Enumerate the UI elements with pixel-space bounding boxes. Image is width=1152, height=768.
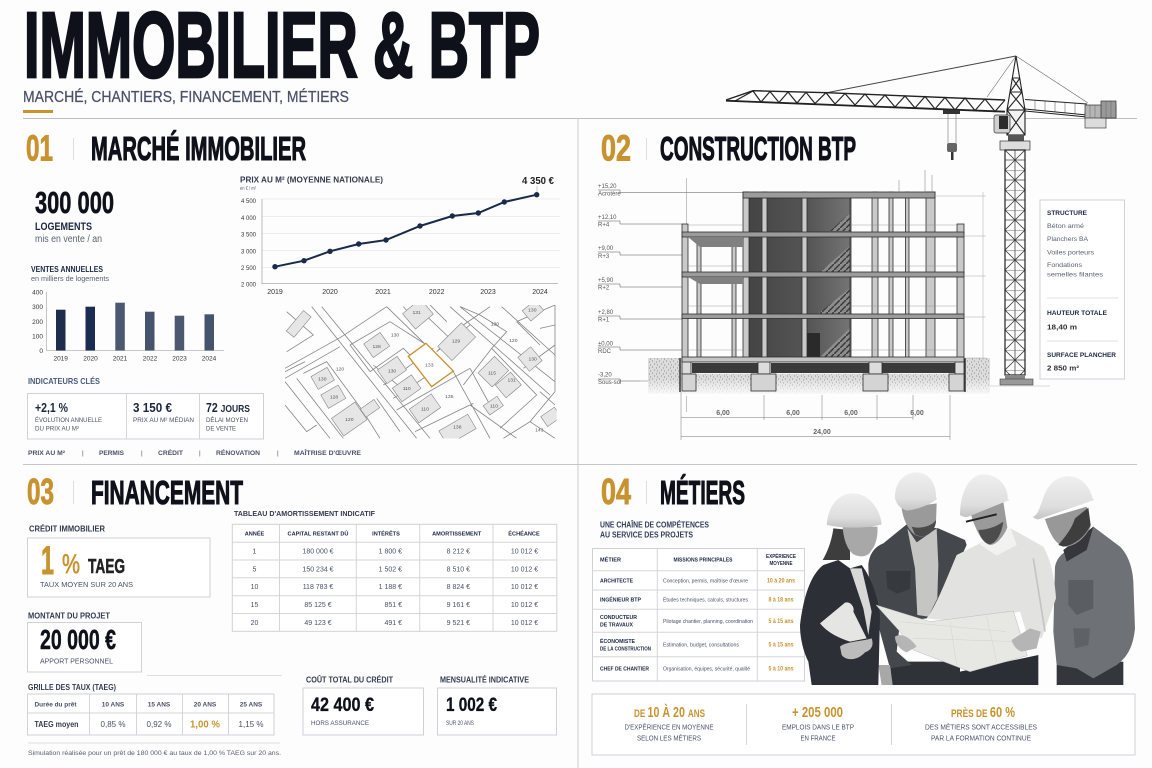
table: grille des taux: TAEG moyen bbox=[34, 720, 79, 729]
cadastral map: 130 bbox=[491, 322, 499, 328]
cadastral map: 110 bbox=[490, 403, 498, 409]
line chart: prix au m²: 4 000 bbox=[241, 215, 256, 222]
card: crédit immobilier: TAEG bbox=[88, 556, 125, 578]
bar chart: ventes annuelles: en milliers de logements bbox=[31, 274, 109, 283]
panel: structure specifications: SURFACE PLANCHER bbox=[1047, 352, 1116, 359]
stat: emplois bbox=[782, 705, 854, 742]
card: montant du projet: APPORT PERSONNEL bbox=[40, 656, 113, 666]
dimension lines: 6,00 bbox=[786, 410, 800, 417]
table: grille des taux: 10 ANS bbox=[102, 702, 125, 708]
cadastral map: 138 bbox=[453, 425, 462, 431]
table: grille des taux: 0,85 % bbox=[101, 720, 125, 729]
card: montant du projet: 20 000 € bbox=[40, 624, 116, 655]
line chart: prix au m²: 2024 bbox=[532, 289, 548, 296]
bar chart: ventes annuelles: 100 bbox=[32, 334, 43, 340]
tag row: PERMIS bbox=[99, 450, 125, 457]
line chart: prix au m²: 4 500 bbox=[241, 198, 256, 205]
panel: 03 financement bbox=[27, 471, 557, 757]
stat: expérience: DE 10 À 20 ANS bbox=[634, 704, 705, 721]
table: amortissement: 150 234 € bbox=[302, 566, 334, 574]
key figure: 300 000 logements: LOGEMENTS bbox=[35, 221, 92, 233]
table: métiers: MÉTIER bbox=[600, 556, 621, 564]
building section drawing bbox=[640, 170, 998, 440]
table: métiers: 5 à 15 ans bbox=[768, 642, 794, 648]
table: amortissement: ÉCHÉANCE bbox=[508, 530, 540, 538]
table: amortissement: CAPITAL RESTANT DÛ bbox=[288, 530, 348, 538]
panel: structure specifications: Fondations bbox=[1047, 262, 1083, 269]
cadastral map: 110 bbox=[421, 407, 429, 413]
cadastral map: 130 bbox=[388, 368, 396, 374]
table: métiers: Estimation, budget, consultations bbox=[663, 642, 739, 648]
line chart: prix au m²: 2022 bbox=[429, 289, 445, 296]
panel: structure specifications: HAUTEUR TOTALE bbox=[1047, 310, 1107, 317]
card: mensualité indicative: 1 002 € bbox=[446, 695, 497, 716]
table: métiers bbox=[592, 548, 804, 681]
table: amortissement: 10 012 € bbox=[511, 620, 538, 627]
card: crédit immobilier: CRÉDIT IMMOBILIER bbox=[29, 524, 105, 534]
section heading 03: FINANCEMENT bbox=[91, 474, 243, 511]
level labels: +2,80 bbox=[598, 310, 614, 316]
dimension lines: 6,00 bbox=[910, 410, 924, 417]
section heading 02: 02 bbox=[601, 128, 631, 168]
tag row: | bbox=[277, 450, 279, 457]
panel: structure specifications: Planchers BA bbox=[1047, 236, 1088, 243]
panel: structure specifications: 2 850 m² bbox=[1047, 366, 1080, 372]
tower crane bbox=[726, 56, 1116, 386]
level labels: R+3 bbox=[598, 254, 610, 260]
table: métiers: ARCHITECTE bbox=[600, 578, 633, 584]
line chart: prix au m²: PRIX AU M² (MOYENNE NATIONALE) bbox=[240, 174, 383, 184]
stat: formation: DES MÉTIERS SONT ACCESSIBLES bbox=[925, 722, 1037, 732]
panel: structure specifications bbox=[1040, 200, 1124, 379]
section heading 01 bbox=[26, 128, 306, 168]
table: métiers: ÉCONOMISTE bbox=[600, 637, 635, 645]
level labels: +9,00 bbox=[598, 246, 614, 252]
level labels: R+2 bbox=[598, 286, 610, 292]
table: amortissement: 1 bbox=[253, 548, 257, 556]
card: coût total du crédit: HORS ASSURANCE bbox=[311, 720, 370, 727]
crane base bbox=[990, 375, 1050, 386]
bar chart: ventes annuelles bbox=[31, 264, 224, 362]
table: amortissement: 10 bbox=[251, 584, 258, 591]
table: amortissement: 491 € bbox=[384, 620, 402, 627]
subheading: UNE CHAÎNE DE COMPÉTENCES bbox=[600, 520, 710, 530]
level labels: Acrotère bbox=[598, 192, 621, 198]
panel: 01 marché immobilier bbox=[26, 128, 561, 457]
cadastral map: 131 bbox=[507, 378, 516, 384]
table: métiers: Conception, permis, maîtrise d'œuvre bbox=[663, 578, 748, 584]
table: métiers: CONDUCTEUR bbox=[600, 615, 637, 621]
table: amortissement: 5 bbox=[253, 566, 257, 574]
key indicators: INDICATEURS CLÉS bbox=[28, 376, 100, 386]
panel: structure specifications: Béton armé bbox=[1047, 223, 1084, 230]
bar chart: ventes annuelles: 2024 bbox=[202, 356, 217, 362]
line chart: prix au m² bbox=[240, 174, 560, 296]
section heading 04 bbox=[601, 471, 745, 512]
cadastral map: 130 bbox=[528, 308, 537, 314]
card: crédit immobilier bbox=[28, 524, 210, 597]
worker 3 bbox=[927, 474, 1056, 685]
key indicators: DU PRIX AU M² bbox=[35, 426, 79, 432]
blueprint held by workers bbox=[876, 605, 1041, 672]
panel: structure specifications: semelles filantes bbox=[1047, 272, 1104, 278]
table: amortissement: 851 € bbox=[384, 602, 402, 609]
key indicators: DE VENTE bbox=[206, 426, 236, 432]
line chart: prix au m²: 2019 bbox=[267, 289, 283, 296]
card: crédit immobilier: TAUX MOYEN SUR 20 ANS bbox=[40, 580, 133, 589]
line chart: prix au m²: 2 000 bbox=[241, 282, 256, 288]
table: métiers: MISSIONS PRINCIPALES bbox=[674, 558, 733, 564]
key indicators: DÉLAI MOYEN bbox=[206, 417, 248, 424]
key figures banner bbox=[592, 694, 1135, 755]
frame bbox=[682, 170, 964, 362]
accent bar bbox=[23, 110, 53, 113]
table: amortissement: TABLEAU D'AMORTISSEMENT INDICATIF bbox=[234, 509, 375, 518]
table: grille des taux bbox=[28, 683, 274, 735]
table: amortissement: 10 012 € bbox=[511, 602, 538, 609]
line chart: prix au m²: en € / m² bbox=[240, 186, 256, 192]
table: amortissement: 10 012 € bbox=[511, 584, 538, 591]
dimension lines bbox=[681, 192, 986, 440]
stat: emplois: + 205 000 bbox=[792, 705, 843, 721]
section heading 04: MÉTIERS bbox=[660, 474, 745, 511]
cadastral map: 115 bbox=[488, 370, 496, 376]
tag row: | bbox=[82, 450, 84, 457]
key indicators: PRIX AU M² MÉDIAN bbox=[133, 417, 194, 424]
panel: structure specifications: STRUCTURE bbox=[1047, 210, 1087, 217]
stat: expérience bbox=[624, 704, 714, 742]
stairs bbox=[807, 213, 850, 357]
counterweight bbox=[1085, 101, 1116, 128]
line chart: prix au m²: 4 350 € bbox=[522, 175, 554, 187]
table: grille des taux: 15 ANS bbox=[148, 702, 171, 708]
table: métiers: Organisation, équipes, sécurité, qualité bbox=[663, 666, 750, 672]
table: métiers: 5 à 10 ans bbox=[768, 666, 794, 672]
cadastral map: 130 bbox=[318, 377, 327, 383]
section heading 02: CONSTRUCTION BTP bbox=[660, 130, 856, 167]
subheading bbox=[600, 520, 710, 540]
turntable bbox=[1000, 135, 1030, 150]
subheading: AU SERVICE DES PROJETS bbox=[600, 530, 694, 540]
table: grille des taux: Durée du prêt bbox=[34, 702, 77, 708]
cadastral map: 130 bbox=[528, 357, 537, 363]
stat: formation bbox=[925, 705, 1037, 742]
cadastral map: 131 bbox=[413, 310, 421, 316]
key indicators: +2,1 % bbox=[35, 400, 68, 415]
table: métiers: MOYENNE bbox=[770, 561, 793, 567]
stat: emplois: EMPLOIS DANS LE BTP bbox=[782, 724, 854, 732]
level labels: ±0,00 bbox=[598, 342, 614, 348]
line chart: prix au m²: 3 000 bbox=[241, 248, 256, 256]
stat: formation: PAR LA FORMATION CONTINUE bbox=[931, 736, 1031, 742]
crane jib bbox=[726, 56, 1088, 117]
panel: structure specifications: 18,40 m bbox=[1047, 324, 1077, 332]
worker 2 bbox=[868, 472, 967, 685]
cadastral map bbox=[285, 305, 557, 438]
line chart: prix au m²: 2020 bbox=[322, 289, 338, 296]
line chart: prix au m²: 3 500 bbox=[241, 232, 256, 238]
card: montant du projet bbox=[28, 610, 142, 672]
bar chart: ventes annuelles: 0 bbox=[39, 348, 43, 355]
key figure: 300 000 logements: 300 000 bbox=[35, 185, 114, 220]
line chart: prix au m²: 2021 bbox=[375, 289, 391, 296]
card: mensualité indicative: MENSUALITÉ INDICATIVE bbox=[440, 676, 530, 684]
bar chart: ventes annuelles: 400 bbox=[32, 290, 43, 296]
tag row: | bbox=[141, 450, 143, 457]
section heading 02 bbox=[601, 128, 856, 168]
table: grille des taux: 1,00 % bbox=[190, 720, 220, 730]
panel: 02 construction BTP bbox=[598, 56, 1124, 440]
table: amortissement: 49 123 € bbox=[304, 620, 332, 627]
level labels: -3,20 bbox=[598, 372, 612, 378]
panel: structure specifications: Voiles porteurs bbox=[1047, 250, 1095, 256]
section heading 03: 03 bbox=[27, 471, 54, 512]
soil and foundations bbox=[640, 358, 998, 396]
level labels: RDC bbox=[598, 349, 612, 355]
cadastral map: 129 bbox=[452, 338, 460, 344]
table: amortissement: AMORTISSEMENT bbox=[432, 532, 482, 538]
mast bbox=[1005, 150, 1025, 375]
cadastral map: 120 bbox=[336, 367, 344, 373]
level labels bbox=[598, 178, 743, 412]
tag row: PRIX AU M² bbox=[28, 450, 66, 457]
section heading 01: 01 bbox=[26, 128, 53, 168]
card: mensualité indicative: SUR 20 ANS bbox=[446, 720, 474, 727]
table: amortissement: 10 012 € bbox=[511, 548, 538, 556]
bar chart: ventes annuelles: 200 bbox=[32, 319, 43, 326]
cadastral map: 120 bbox=[509, 338, 518, 344]
table: grille des taux: 1,15 % bbox=[239, 720, 263, 729]
bar chart: ventes annuelles: VENTES ANNUELLES bbox=[31, 264, 103, 274]
table: métiers: 5 à 15 ans bbox=[768, 619, 794, 625]
key indicators bbox=[28, 376, 264, 439]
dimension lines: 24,00 bbox=[813, 429, 831, 436]
table: amortissement: 9 521 € bbox=[447, 620, 470, 627]
table: métiers: CHEF DE CHANTIER bbox=[600, 666, 649, 672]
table: amortissement: 15 bbox=[251, 602, 258, 609]
table: amortissement: 118 783 € bbox=[303, 584, 333, 591]
table: métiers: Études techniques, calculs, structures bbox=[663, 596, 748, 604]
tag row: MAÎTRISE D'ŒUVRE bbox=[294, 448, 362, 457]
level labels: +12,10 bbox=[598, 215, 617, 221]
table: métiers: EXPÉRIENCE bbox=[766, 552, 797, 560]
table: amortissement: 8 824 € bbox=[447, 584, 470, 591]
level labels: R+1 bbox=[598, 318, 610, 324]
stat: expérience: SELON LES MÉTIERS bbox=[637, 734, 701, 742]
tag row: CRÉDIT bbox=[158, 448, 183, 457]
cab bbox=[994, 115, 1010, 133]
footnote: Simulation réalisée pour un prêt de 180 000 € au taux de 1,00 % TAEG sur 20 ans. bbox=[28, 750, 281, 757]
level labels: Sous-sol bbox=[598, 380, 621, 386]
card: crédit immobilier: % bbox=[62, 549, 80, 579]
bar chart: ventes annuelles: 300 bbox=[32, 304, 43, 311]
table: grille des taux: 25 ANS bbox=[240, 702, 263, 708]
cadastral map: 128 bbox=[373, 344, 381, 350]
cadastral map: 120 bbox=[345, 417, 354, 423]
table: amortissement: ANNÉE bbox=[245, 530, 265, 538]
table: amortissement: 85 125 € bbox=[304, 602, 332, 609]
stat: expérience: D'EXPÉRIENCE EN MOYENNE bbox=[624, 722, 714, 732]
illustration: four workers with helmets reading a plan bbox=[800, 472, 1135, 685]
bar chart: ventes annuelles: 2019 bbox=[53, 356, 68, 362]
table: métiers: DE LA CONSTRUCTION bbox=[600, 646, 651, 652]
table: métiers: Pilotage chantier, planning, coordination bbox=[663, 619, 753, 625]
bar chart: ventes annuelles: 2021 bbox=[113, 356, 128, 362]
cadastral map: 135 bbox=[445, 394, 454, 400]
table: amortissement: 20 bbox=[251, 620, 258, 627]
cadastral map: 128 bbox=[330, 394, 338, 400]
tag row bbox=[28, 448, 362, 457]
tag row: | bbox=[199, 450, 201, 457]
table: amortissement: 9 161 € bbox=[447, 602, 470, 609]
bar chart: ventes annuelles: 2022 bbox=[143, 356, 158, 362]
table: amortissement: 1 502 € bbox=[379, 566, 402, 574]
table: grille des taux: 0,92 % bbox=[147, 720, 171, 729]
cadastral map: 133 bbox=[425, 363, 434, 369]
table: métiers: 8 à 18 ans bbox=[768, 598, 794, 604]
worker 4 bbox=[1033, 476, 1135, 685]
table: amortissement: 1 800 € bbox=[379, 548, 402, 556]
table: amortissement: INTÉRÊTS bbox=[372, 530, 400, 538]
cadastral map: 110 bbox=[403, 386, 411, 392]
worker 1 bbox=[800, 493, 882, 685]
card: coût total du crédit bbox=[303, 676, 424, 735]
panel: 04 métiers bbox=[592, 471, 1135, 755]
card: crédit immobilier: 1 bbox=[41, 539, 54, 583]
key indicators: ÉVOLUTION ANNUELLE bbox=[35, 417, 102, 424]
table: amortissement bbox=[232, 509, 557, 631]
key indicators: 3 150 € bbox=[133, 400, 172, 415]
table: amortissement: 10 012 € bbox=[511, 566, 538, 574]
card: montant du projet: MONTANT DU PROJET bbox=[28, 610, 111, 620]
bar chart: ventes annuelles: 2020 bbox=[83, 356, 98, 362]
table: métiers: DE TRAVAUX bbox=[600, 622, 633, 628]
section heading 03 bbox=[27, 471, 243, 512]
cadastral map: 130 bbox=[391, 332, 399, 338]
table: amortissement: 1 188 € bbox=[379, 584, 402, 591]
stat: emplois: EN FRANCE bbox=[800, 736, 836, 742]
card: coût total du crédit: 42 400 € bbox=[311, 695, 374, 716]
table: grille des taux: 20 ANS bbox=[194, 702, 217, 708]
card: mensualité indicative bbox=[438, 676, 556, 735]
hook bbox=[943, 110, 960, 160]
cadastral map: 143 bbox=[535, 428, 544, 434]
key figure: 300 000 logements bbox=[35, 185, 114, 245]
line chart: prix au m²: 2 500 bbox=[241, 265, 256, 272]
dark core bbox=[749, 198, 850, 358]
card: coût total du crédit: COÛT TOTAL DU CRÉDIT bbox=[306, 676, 393, 684]
section heading 01: MARCHÉ IMMOBILIER bbox=[91, 130, 306, 167]
table: amortissement: 8 212 € bbox=[447, 548, 470, 556]
level labels: +15,20 bbox=[598, 184, 617, 190]
dimension lines: 6,00 bbox=[716, 410, 730, 417]
key indicators: 72 JOURS bbox=[206, 400, 250, 415]
key figure: 300 000 logements: mis en vente / an bbox=[35, 234, 102, 245]
line chart: prix au m²: 2023 bbox=[480, 289, 496, 296]
subtitle: MARCHÉ, CHANTIERS, FINANCEMENT, MÉTIERS bbox=[23, 89, 349, 106]
table: métiers: 10 à 20 ans bbox=[767, 578, 796, 584]
table: amortissement: 8 510 € bbox=[447, 566, 470, 574]
dimension lines: 6,00 bbox=[844, 410, 858, 417]
table: grille des taux: GRILLE DES TAUX (TAEG) bbox=[28, 683, 116, 692]
level labels: +5,90 bbox=[598, 278, 614, 284]
tag row: RÉNOVATION bbox=[216, 448, 260, 457]
level labels: R+4 bbox=[598, 222, 610, 228]
bar chart: ventes annuelles: 2023 bbox=[172, 356, 187, 362]
table: amortissement: 180 000 € bbox=[302, 548, 334, 556]
stat: formation: PRÈS DE 60 % bbox=[951, 705, 1015, 721]
section heading 04: 04 bbox=[601, 471, 631, 512]
tower head bbox=[1007, 56, 1025, 135]
table: métiers: INGÉNIEUR BTP bbox=[600, 596, 641, 604]
